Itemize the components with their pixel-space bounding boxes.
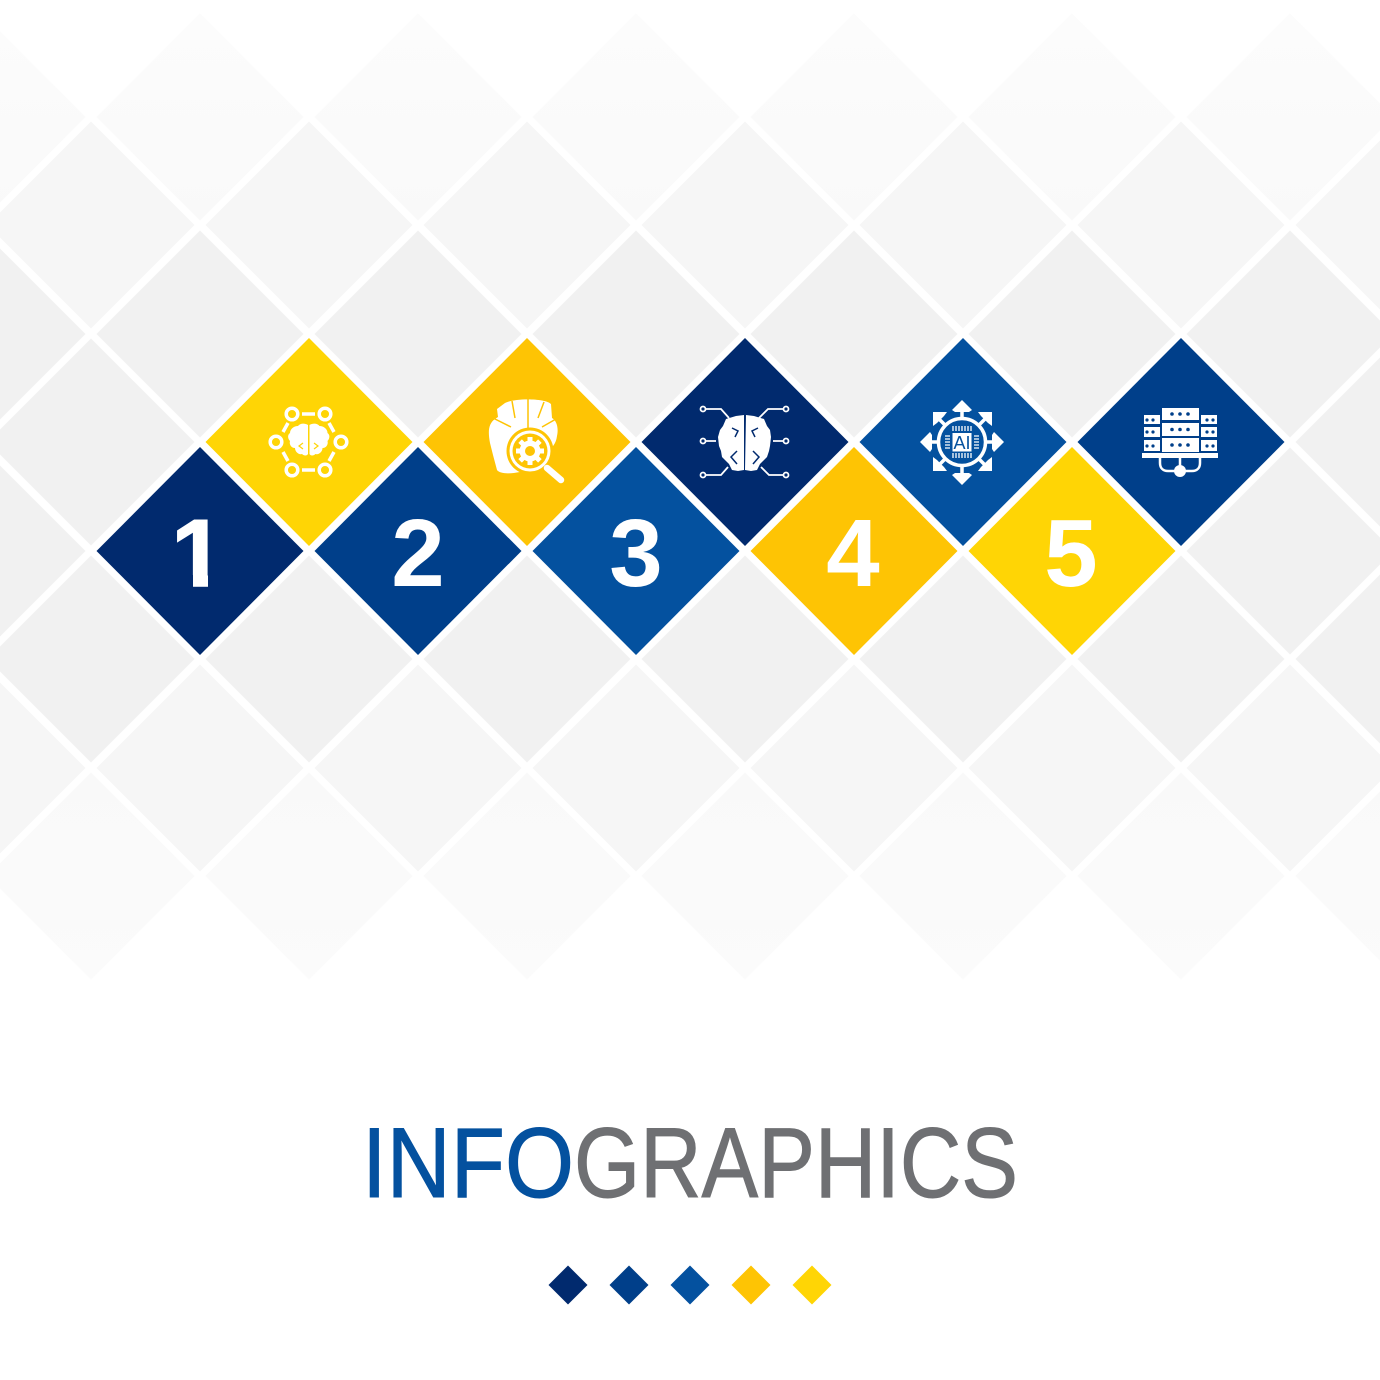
title: GRAPHICS	[574, 1107, 1018, 1218]
number diamond 3: 3	[609, 500, 663, 607]
icon diamond 1: brain network	[206, 338, 412, 546]
number diamond 4	[750, 447, 958, 655]
number diamond 5: 5	[1044, 500, 1098, 607]
title: INFO	[362, 1107, 574, 1218]
icon diamond 4: AI chip with arrows: AI	[953, 433, 971, 453]
icon diamond 2: brain with magnifier and gear	[424, 338, 630, 546]
number diamond 1	[96, 447, 304, 655]
title	[362, 1107, 1018, 1218]
number diamond 5	[968, 447, 1176, 655]
number diamond 1: 1	[171, 500, 225, 607]
number diamond 2	[314, 447, 522, 655]
number diamond 3	[532, 447, 740, 655]
background diamond grid	[0, 14, 1380, 980]
number diamond 2: 2	[391, 500, 445, 607]
icon diamond 3: brain with circuit lines	[642, 338, 848, 546]
small diamond legend	[548, 1266, 832, 1304]
icon diamond 4: AI chip with arrows	[860, 338, 1066, 546]
icon diamond 5: server racks	[1078, 338, 1284, 546]
number diamond 4: 4	[826, 500, 880, 607]
